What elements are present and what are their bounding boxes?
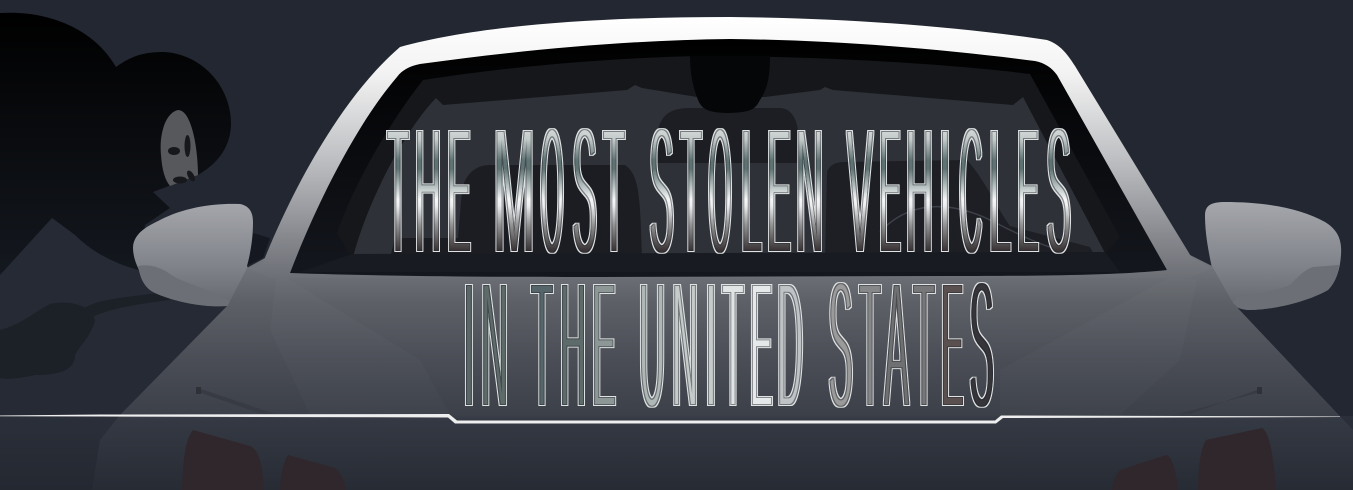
title line one: S xyxy=(572,88,597,293)
title line one: E xyxy=(880,88,901,293)
right wing mirror xyxy=(1205,202,1341,310)
title line two: S xyxy=(828,242,853,447)
title line one: T xyxy=(387,89,409,293)
white divider line xyxy=(0,414,1340,424)
title line one: M xyxy=(493,90,535,294)
interior dark layer xyxy=(337,56,1120,260)
title line two: I xyxy=(463,244,475,448)
title line two: H xyxy=(560,243,586,447)
title line one: H xyxy=(415,89,441,293)
title line one: N xyxy=(796,88,823,293)
title line two: A xyxy=(884,243,909,448)
thief face xyxy=(161,110,198,186)
right tail lights xyxy=(1112,428,1276,490)
right seat xyxy=(825,160,1096,258)
title line one: T xyxy=(603,89,625,293)
title line one: V xyxy=(847,90,873,294)
title line two: S xyxy=(969,242,994,447)
title xyxy=(387,88,1071,448)
title line one: E xyxy=(767,89,791,293)
title line two: E xyxy=(750,242,772,447)
title line one: E xyxy=(447,89,471,293)
title line two: T xyxy=(913,243,935,447)
thief silhouette xyxy=(0,13,270,275)
ground strip xyxy=(0,416,1353,490)
left wing mirror xyxy=(133,204,253,306)
title line two: E xyxy=(592,243,616,447)
title line two: N xyxy=(481,242,508,447)
title line two xyxy=(463,242,994,448)
windshield glass xyxy=(290,39,1167,277)
car body xyxy=(92,255,1353,490)
right wiper xyxy=(1178,387,1262,414)
title line one: L xyxy=(741,88,762,293)
title line two: I xyxy=(705,244,717,448)
title line one: L xyxy=(989,89,1011,294)
title line two: D xyxy=(777,243,803,447)
title line two: U xyxy=(639,243,665,447)
title line one: H xyxy=(906,88,933,293)
title line two: N xyxy=(672,243,698,447)
title line two: T xyxy=(531,243,553,447)
steering wheel arc xyxy=(880,207,1060,250)
title line one: S xyxy=(649,88,674,293)
title line one: E xyxy=(1018,88,1039,293)
title line one: T xyxy=(680,89,702,293)
title line one xyxy=(387,88,1071,294)
central seat band xyxy=(655,108,800,163)
left wiper xyxy=(196,387,275,414)
left tail lights xyxy=(182,430,346,490)
interior light layer xyxy=(353,85,1105,258)
title line two: E xyxy=(941,242,963,447)
left seat xyxy=(390,165,642,258)
title line one: S xyxy=(1046,88,1071,293)
title line two: T xyxy=(859,243,881,447)
lighter backdrop under thief xyxy=(0,218,228,415)
title line one: O xyxy=(541,88,563,293)
thief arm and crowbar xyxy=(0,292,170,379)
rear view mirror xyxy=(690,56,770,113)
dashboard band xyxy=(300,252,1120,272)
hood creases xyxy=(270,272,1197,415)
title line one: I xyxy=(939,90,951,294)
windshield frame xyxy=(247,17,1212,278)
title line two: T xyxy=(722,243,744,447)
title line one: O xyxy=(709,88,731,293)
title line one: C xyxy=(959,88,982,293)
